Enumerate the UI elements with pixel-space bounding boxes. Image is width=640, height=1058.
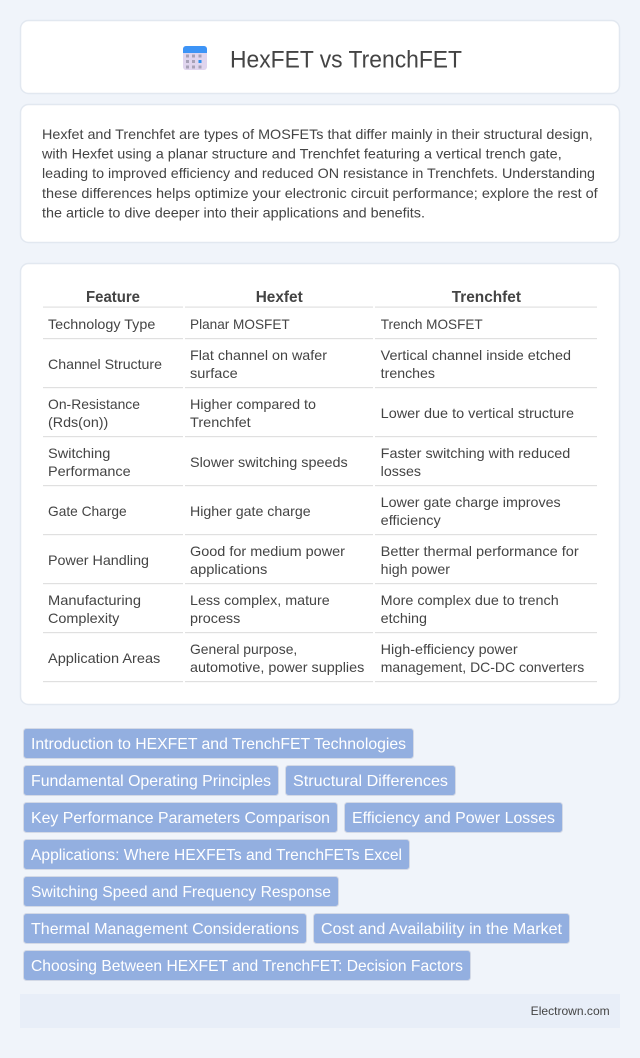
intro text: the article to dive deeper into their applications and benefits.	[42, 204, 425, 220]
table row: power handling: Better thermal performance for	[381, 543, 579, 559]
tag: structural differences	[286, 766, 456, 796]
table header row: Hexfet	[256, 289, 303, 306]
title: HexFET vs TrenchFET	[230, 46, 462, 74]
table row: gate charge: efficiency	[381, 512, 441, 528]
table row: on-resistance: (Rds(on))	[48, 414, 108, 430]
table row: on-resistance	[43, 396, 597, 437]
tag: structural differences: Structural Differences	[293, 773, 448, 790]
table row: on-resistance: Trenchfet	[190, 414, 251, 430]
table row: technology type: Planar MOSFET	[190, 316, 290, 332]
table row: switching performance: Performance	[48, 463, 131, 479]
table row: application areas: management, DC-DC converters	[381, 659, 584, 675]
table header row: Feature	[86, 289, 140, 306]
table row: channel structure: Vertical channel inside etched	[381, 347, 571, 363]
table row: application areas	[43, 641, 597, 682]
table row: channel structure: Channel Structure	[48, 356, 162, 372]
table row: application areas: automotive, power supplies	[190, 659, 364, 675]
table row: application areas: Application Areas	[48, 650, 160, 666]
table row: application areas: High-efficiency power	[381, 641, 518, 657]
table row: channel structure: trenches	[381, 365, 435, 381]
panel: comparison table	[20, 264, 620, 704]
table row: channel structure	[43, 347, 597, 388]
tag: applications	[24, 840, 410, 870]
tag: efficiency and losses	[344, 802, 562, 832]
table row: switching performance	[43, 445, 597, 486]
intro text: Hexfet and Trenchfet are types of MOSFETs that differ mainly in their structural design,	[42, 126, 593, 142]
panel: introduction	[20, 104, 620, 242]
table row: switching performance: losses	[381, 463, 421, 479]
table row: manufacturing complexity: Complexity	[48, 610, 119, 626]
table row: gate charge: Higher gate charge	[190, 503, 311, 519]
table row: power handling: high power	[381, 561, 450, 577]
tag: introduction	[24, 728, 414, 758]
icon: calendar	[183, 46, 207, 70]
table row: on-resistance: On-Resistance	[48, 396, 140, 412]
tag: cost and availability: Cost and Availability in the Market	[321, 921, 563, 938]
tag: thermal management	[24, 914, 306, 944]
table row: manufacturing complexity: More complex due to trench	[381, 592, 559, 608]
table row: switching performance: Switching	[48, 445, 110, 461]
table row: manufacturing complexity: etching	[381, 610, 427, 626]
tag: operating principles	[24, 766, 278, 796]
table header row: Trenchfet	[452, 289, 522, 306]
tag: cost and availability	[314, 914, 570, 944]
table row: channel structure: Flat channel on wafer	[190, 347, 327, 363]
table row: power handling	[43, 543, 597, 584]
footer bar: Electrown.com	[531, 1004, 610, 1018]
table row: channel structure: surface	[190, 365, 238, 381]
tag: switching speed: Switching Speed and Frequency Response	[31, 884, 331, 901]
tag: introduction: Introduction to HEXFET and TrenchFET Technologies	[31, 736, 406, 753]
table row: application areas: General purpose,	[190, 641, 297, 657]
table row: on-resistance: Lower due to vertical structure	[381, 405, 574, 421]
table row: power handling: applications	[190, 561, 267, 577]
footer bar	[20, 994, 620, 1028]
tag: operating principles: Fundamental Operating Principles	[31, 773, 271, 790]
table row: power handling: Power Handling	[48, 552, 149, 568]
intro text: these differences helps optimize your electronic circuit performance; explore the rest of	[42, 185, 598, 201]
table row: manufacturing complexity	[43, 592, 597, 633]
table row: gate charge	[43, 494, 597, 535]
table row: technology type	[43, 316, 597, 339]
table row: switching performance: Faster switching with reduced	[381, 445, 570, 461]
table row: on-resistance: Higher compared to	[190, 396, 316, 412]
table row: manufacturing complexity: Less complex, mature	[190, 592, 330, 608]
intro text	[41, 126, 598, 220]
tag: decision factors	[24, 950, 470, 980]
table row: gate charge: Lower gate charge improves	[381, 494, 561, 510]
panel: header	[20, 20, 620, 94]
tag: thermal management: Thermal Management Considerations	[31, 921, 299, 938]
table row: manufacturing complexity: Manufacturing	[48, 592, 141, 608]
table row: technology type: Technology Type	[48, 316, 156, 332]
intro text: with Hexfet using a planar structure and Trenchfet featuring a vertical trench gate,	[41, 146, 562, 162]
tag: performance parameters: Key Performance Parameters Comparison	[31, 810, 330, 827]
intro text: leading to improved efficiency and reduced ON resistance in Trenchfets. Understanding	[42, 165, 595, 181]
topic tags	[24, 728, 570, 980]
table row: gate charge: Gate Charge	[48, 503, 127, 519]
table row: manufacturing complexity: process	[190, 610, 240, 626]
table header row	[43, 289, 597, 308]
tag: switching speed	[24, 876, 338, 906]
table row: power handling: Good for medium power	[190, 543, 345, 559]
table row: technology type: Trench MOSFET	[381, 316, 483, 332]
tag: decision factors: Choosing Between HEXFET and TrenchFET: Decision Factors	[31, 958, 463, 975]
tag: efficiency and losses: Efficiency and Power Losses	[352, 810, 555, 827]
tag: applications: Applications: Where HEXFETs and TrenchFETs Excel	[31, 847, 402, 864]
tag: performance parameters	[24, 802, 338, 832]
table row: switching performance: Slower switching speeds	[190, 454, 348, 470]
